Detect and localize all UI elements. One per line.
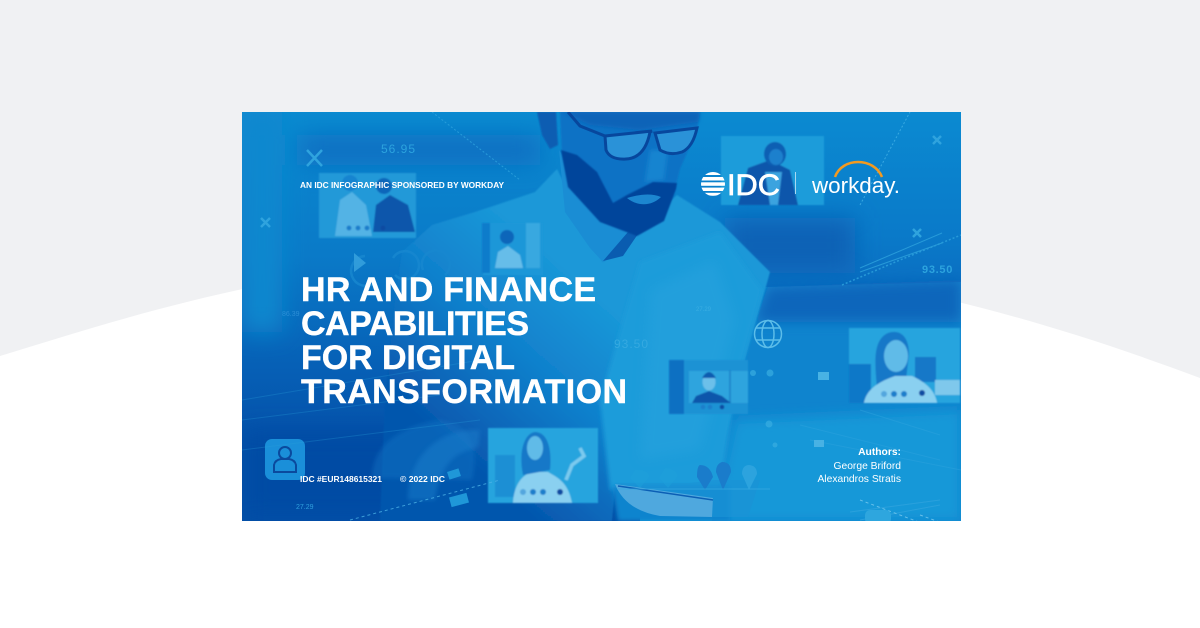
authors: Authors: [858,447,901,458]
laptop screen back [712,282,961,521]
title: TRANSFORMATION [301,373,627,411]
blurred office background [242,130,860,340]
video tile: man thinking [482,223,543,275]
man's shirt [380,169,770,521]
title: HR AND FINANCE [301,271,596,309]
man's glasses [568,112,697,159]
decorative data marks: 86.39 [282,311,300,318]
video tile: man on top right [721,136,824,205]
decorative data marks: 27.29 [296,504,314,511]
authors: Alexandros Stratis [817,474,901,485]
logo divider [795,172,796,194]
collar shadow [603,232,638,261]
video tile: woman waving [488,428,598,503]
logo: workday: workday. [811,173,900,198]
decorative data marks [242,112,961,530]
decorative data marks: 56.95 [381,142,416,156]
logo: IDC [701,172,780,196]
icon: globe [754,320,782,348]
man's face [560,112,700,202]
authors [817,447,901,485]
area below the laptop [612,486,730,521]
report id and copyright: © 2022 IDC [400,474,445,484]
logo: IDC: IDC [727,169,780,202]
report id and copyright: IDC #EUR148615321 [300,474,382,484]
video tile: smiling man in suit [669,360,748,414]
title: CAPABILITIES [301,305,529,343]
decorative data marks: 93.50 [922,264,953,276]
decorative data marks: 93.50 [614,337,649,351]
man's mouth [627,194,661,204]
authors: George Briford [833,461,901,472]
video tile: two colleagues [319,173,416,238]
man's beard [561,150,677,236]
top line: AN IDC INFOGRAPHIC SPONSORED BY WORKDAY [300,180,504,190]
icon: progress dials [350,250,416,287]
man's neck [559,150,627,262]
laptop base [615,484,731,517]
map pins [697,462,731,490]
video tile: woman with headset [849,328,960,403]
panel: cover image [242,112,961,535]
title [301,271,627,411]
report id and copyright [300,474,445,484]
icon: person tile [265,439,305,480]
title: FOR DIGITAL [301,339,515,377]
man's ear [537,112,558,149]
logo: workday [811,162,900,198]
blurred keyboard and hand [372,420,475,480]
decorative data marks: 27.29 [696,307,712,313]
